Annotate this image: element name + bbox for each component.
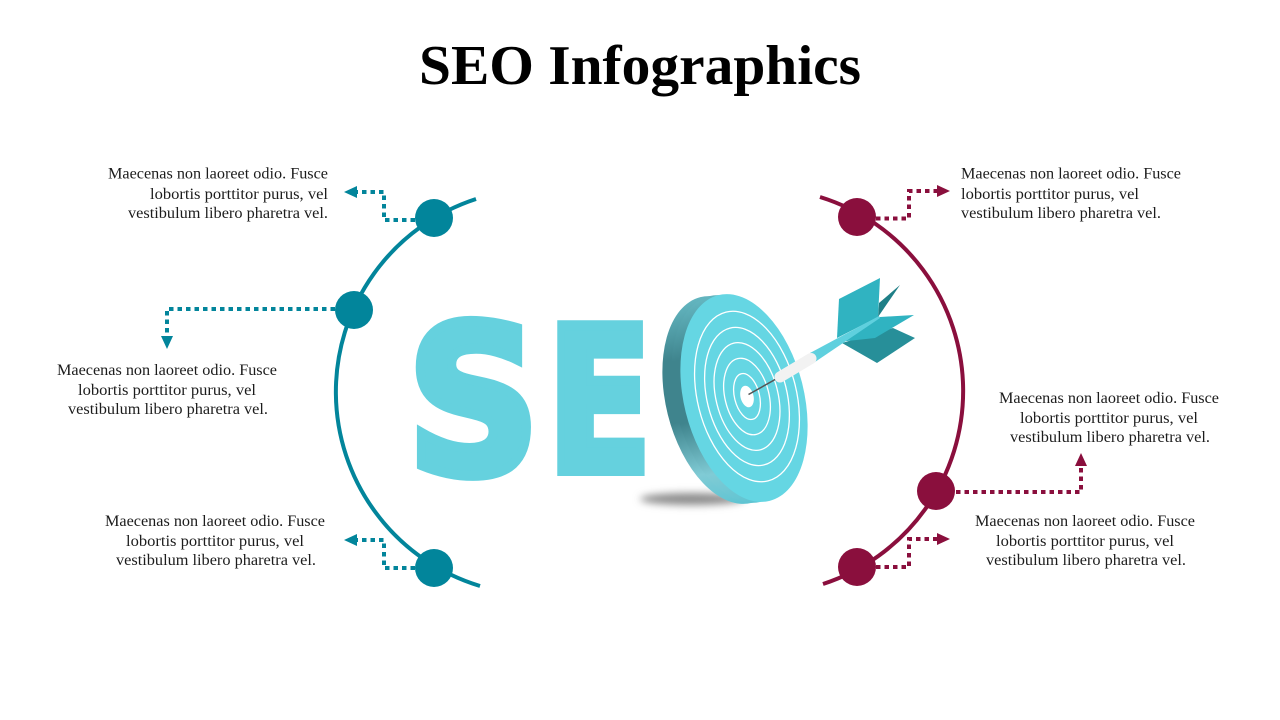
text block: right middle: lobortis porttitor purus, vel bbox=[1020, 410, 1199, 427]
text block: right top: lobortis porttitor purus, vel bbox=[961, 186, 1140, 203]
node: left middle bbox=[335, 291, 373, 329]
text block: right bottom: lobortis porttitor purus, vel bbox=[996, 533, 1175, 550]
text block: right bottom: vestibulum libero pharetra vel. bbox=[986, 552, 1186, 569]
text block: right middle: Maecenas non laoreet odio. Fusce bbox=[999, 390, 1219, 407]
dart barrel bbox=[780, 358, 811, 377]
arrow: right top bbox=[876, 185, 950, 218]
text block: right top: vestibulum libero pharetra vel. bbox=[961, 205, 1161, 222]
node: right bottom bbox=[838, 548, 876, 586]
dart rear fin bbox=[878, 285, 900, 317]
text block: left middle bbox=[57, 362, 277, 418]
arrow: right middle bbox=[956, 453, 1087, 492]
dart right fin bbox=[838, 315, 914, 342]
node: right top bbox=[838, 198, 876, 236]
arrow: right bottom bbox=[876, 533, 950, 567]
dart upper fin bbox=[837, 278, 880, 338]
left arc bbox=[336, 199, 480, 586]
node: left bottom bbox=[415, 549, 453, 587]
text block: right top: Maecenas non laoreet odio. Fusce bbox=[961, 166, 1181, 182]
right maroon arc group bbox=[820, 197, 963, 586]
dart shaft bbox=[810, 316, 880, 362]
arrow: left middle bbox=[161, 309, 335, 349]
left teal arc group bbox=[335, 199, 480, 587]
text block: right top bbox=[961, 166, 1181, 222]
target shadow bbox=[640, 493, 744, 505]
text block: right bottom: Maecenas non laoreet odio. Fusce bbox=[975, 513, 1195, 530]
target face bbox=[660, 281, 828, 515]
text block: right middle bbox=[999, 390, 1219, 446]
dart needle bbox=[748, 379, 776, 394]
text block: right middle: vestibulum libero pharetra vel. bbox=[1010, 429, 1210, 446]
large letter E: E bbox=[547, 286, 652, 519]
text block: left bottom: lobortis porttitor purus, vel bbox=[126, 533, 305, 550]
title: SEO Infographics bbox=[419, 35, 861, 97]
text block: left top: lobortis porttitor purus, vel bbox=[150, 186, 329, 203]
text block: left bottom bbox=[105, 513, 325, 569]
target side wall bbox=[642, 282, 819, 517]
text block: right bottom bbox=[975, 513, 1195, 569]
dart bbox=[748, 278, 915, 394]
text block: left top bbox=[108, 166, 329, 222]
dart lower fin bbox=[842, 328, 915, 363]
text block: left top: vestibulum libero pharetra vel. bbox=[128, 205, 328, 222]
text block: left middle: vestibulum libero pharetra vel. bbox=[68, 401, 268, 418]
node: left top bbox=[415, 199, 453, 237]
node: right middle bbox=[917, 472, 955, 510]
right arc bbox=[820, 197, 963, 584]
arrow: left bottom bbox=[344, 534, 415, 568]
icon: target with dart bbox=[642, 278, 915, 517]
target rings bbox=[678, 300, 816, 493]
text block: left middle: Maecenas non laoreet odio. Fusce bbox=[57, 362, 277, 379]
text block: left top: Maecenas non laoreet odio. Fusce bbox=[108, 166, 328, 182]
text block: left bottom: vestibulum libero pharetra vel. bbox=[116, 552, 316, 569]
arrow: left top bbox=[344, 186, 415, 220]
text block: left bottom: Maecenas non laoreet odio. Fusce bbox=[105, 513, 325, 530]
text block: left middle: lobortis porttitor purus, vel bbox=[78, 382, 257, 399]
large letter S: S bbox=[407, 284, 540, 522]
